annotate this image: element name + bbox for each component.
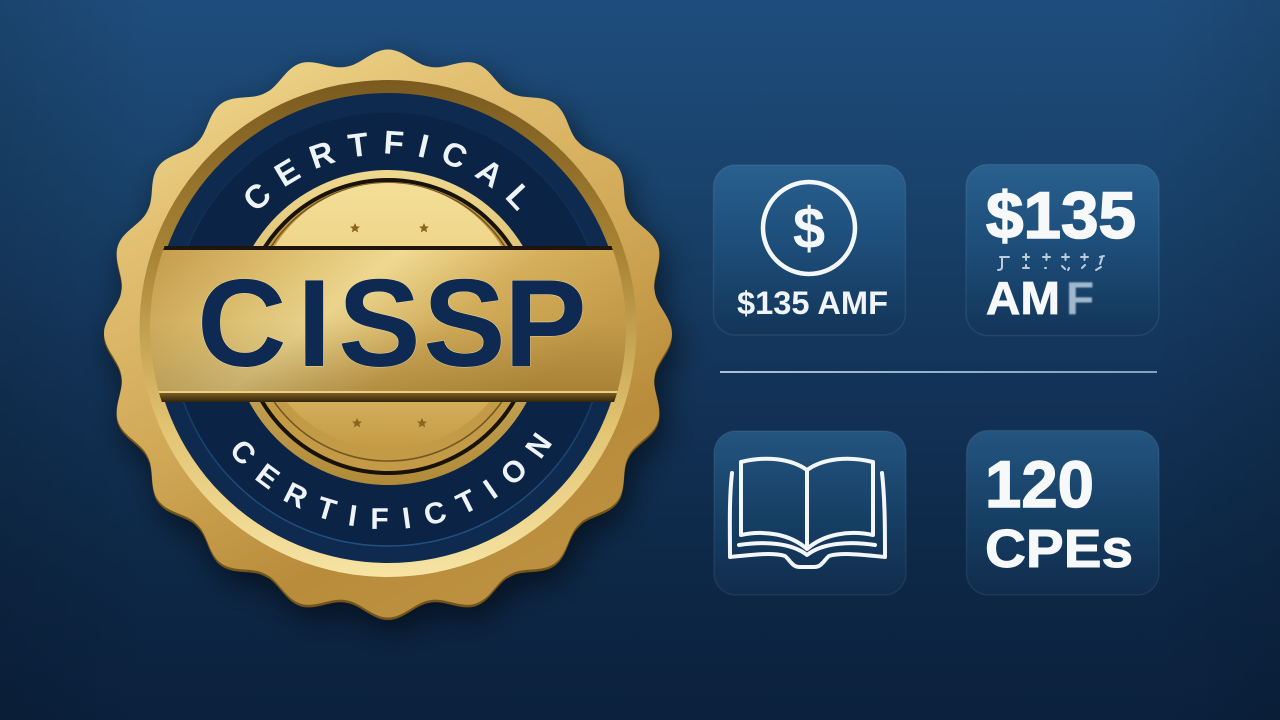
- label: $135 AMF: $135 AMF: [737, 285, 888, 321]
- garbled dotted row: [998, 254, 1104, 270]
- card: $135 AMF large text: [966, 164, 1159, 336]
- curved text: bottom: CERTIFICTION: [232, 432, 552, 529]
- card: open book icon: [714, 431, 906, 595]
- number: 120: 120: [985, 447, 1094, 521]
- banner title: CISSP: CISSP: [197, 255, 587, 393]
- badge gold ring: [140, 80, 636, 577]
- card: dollar icon with $135 AMF: [714, 165, 906, 335]
- label: CPEs: CPEs: [985, 519, 1133, 579]
- icon: open book: [730, 459, 885, 567]
- icon: dollar coin: $: [793, 196, 825, 261]
- divider: [720, 371, 1157, 373]
- medallion stars: [350, 223, 429, 427]
- icon: dollar coin: [763, 182, 855, 274]
- card: 120 CPEs: [966, 430, 1159, 595]
- badge scalloped gold edge: [88, 36, 688, 636]
- gold banner: [140, 246, 640, 402]
- label: AMF with fading F: AM: [986, 272, 1060, 324]
- faded letter F: F: [1066, 272, 1094, 324]
- badge navy field: [153, 93, 623, 563]
- amount: $135: $135: [986, 178, 1136, 252]
- badge: CISSP gold seal: [98, 48, 690, 640]
- curved text: top: CERTFICAL: [245, 130, 526, 212]
- badge centre medallion: [230, 170, 546, 485]
